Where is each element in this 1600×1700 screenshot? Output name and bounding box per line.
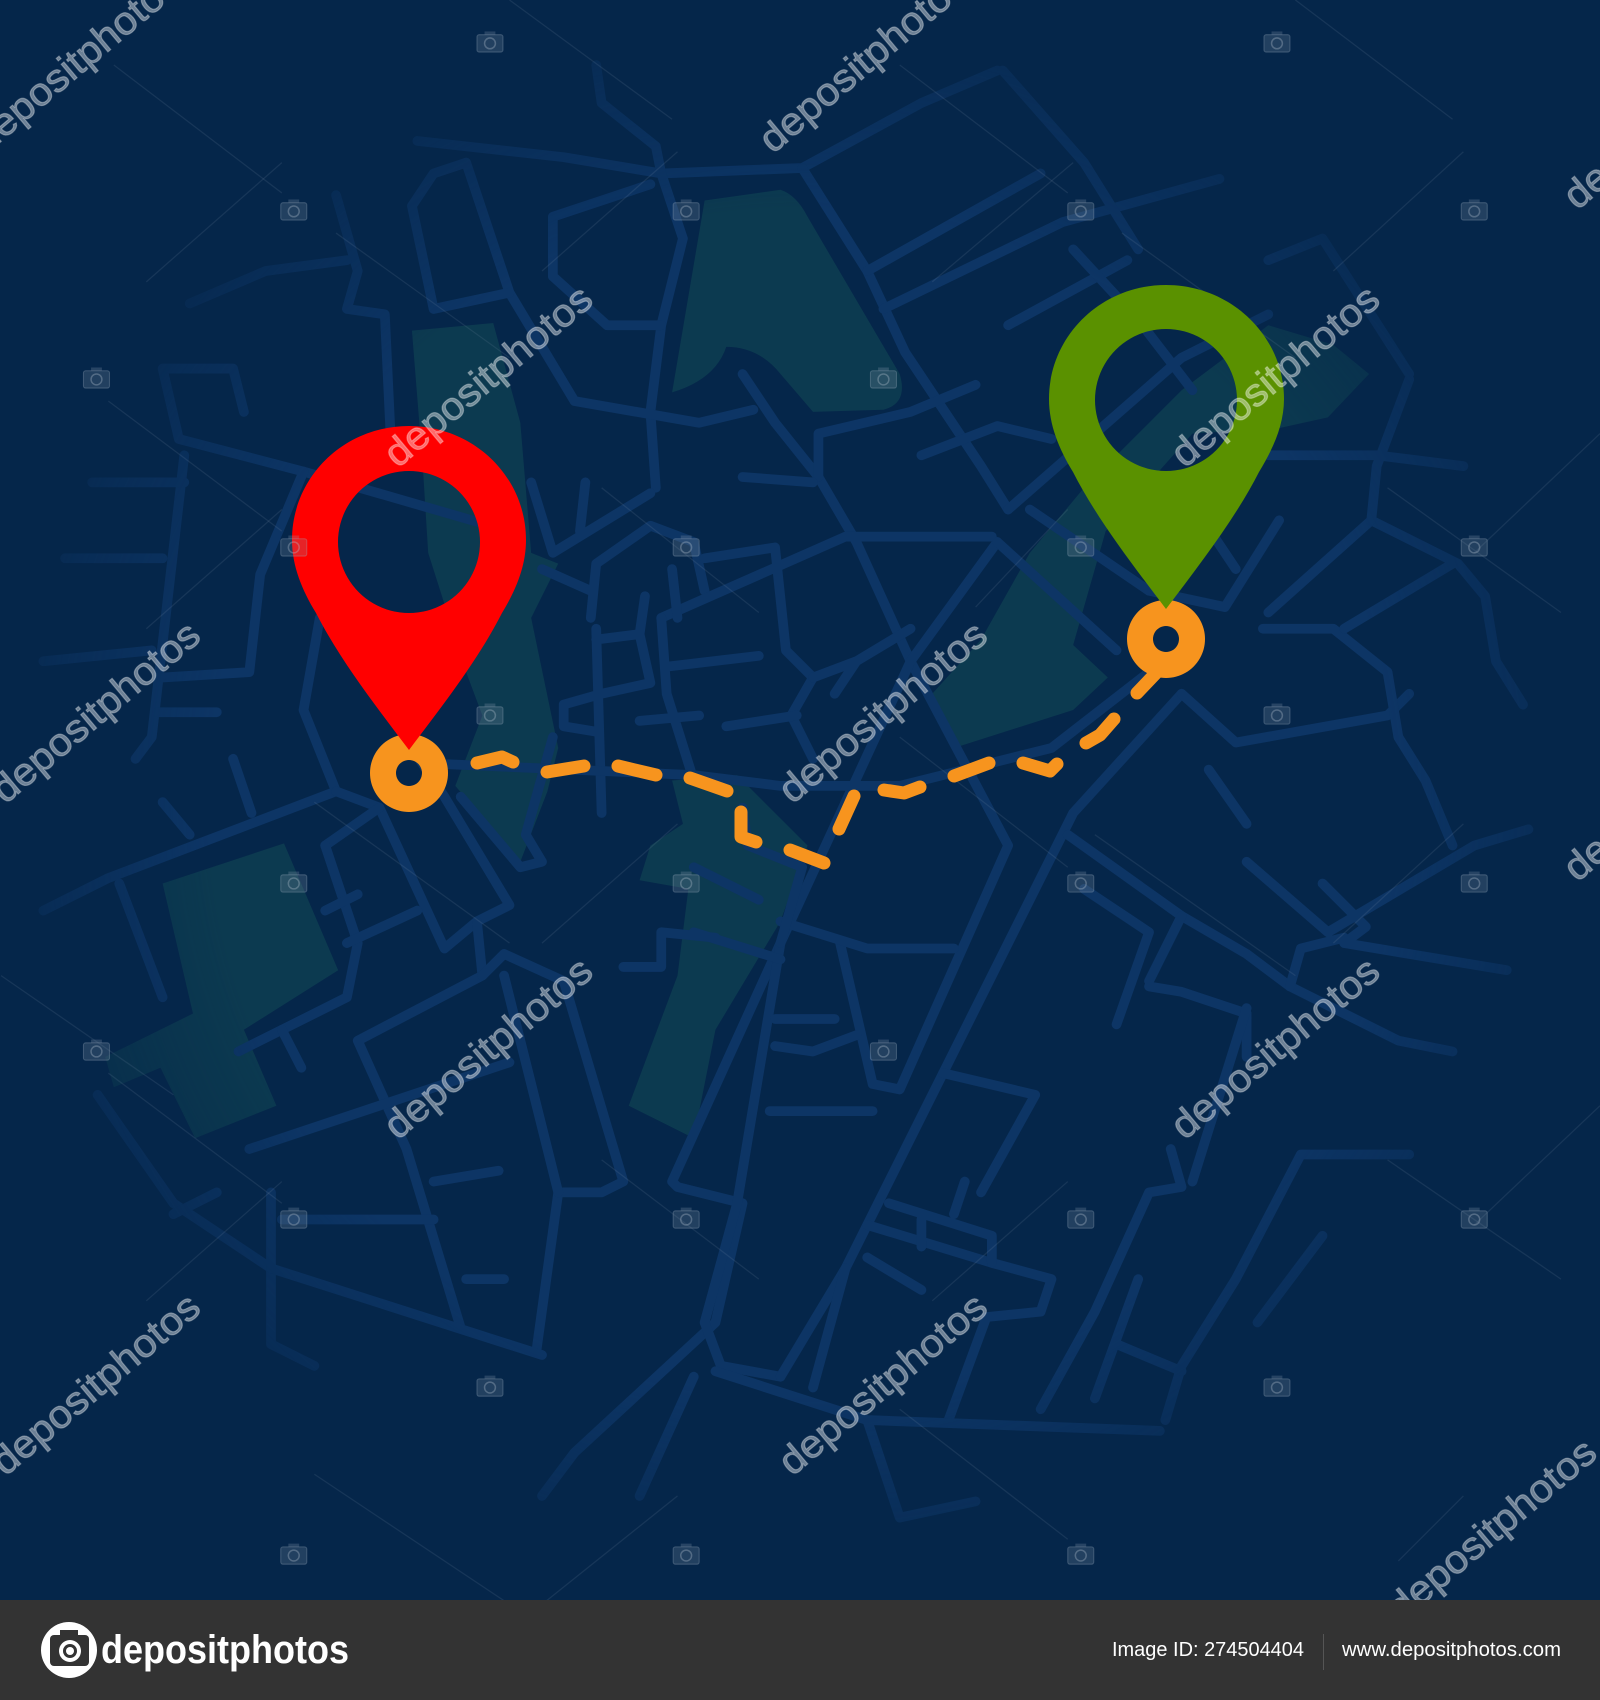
diagonal watermark text: depositphotos (376, 277, 601, 476)
dashed route line (477, 672, 1157, 863)
icon: green destination pin (1049, 285, 1284, 609)
icon: red start pin (292, 426, 526, 750)
green park areas (105, 190, 1369, 1138)
street map (43, 65, 1528, 1518)
image id: Image ID: 274504404 (1112, 1639, 1304, 1661)
watermark camera icons (83, 31, 1487, 1564)
diagonal watermark text: depositphotos (770, 613, 996, 812)
website url: www.depositphotos.com (1341, 1639, 1561, 1661)
diagonal watermark text: depositphotos (1163, 949, 1388, 1148)
icon: start location ring (370, 734, 448, 812)
logo wordmark: depositphotos (101, 1628, 349, 1672)
footer bar (0, 1600, 1600, 1700)
road network (43, 65, 1528, 1518)
diagonal watermark text: depositphotos (770, 1285, 996, 1484)
diagonal watermark text: depositphotos (1380, 1430, 1600, 1629)
icon: destination location ring (1127, 600, 1205, 678)
icon: depositphotos logo (41, 1622, 97, 1678)
diagonal watermark text: depositphotos (376, 949, 601, 1148)
diagonal watermark text: depositphotos (1163, 277, 1388, 476)
